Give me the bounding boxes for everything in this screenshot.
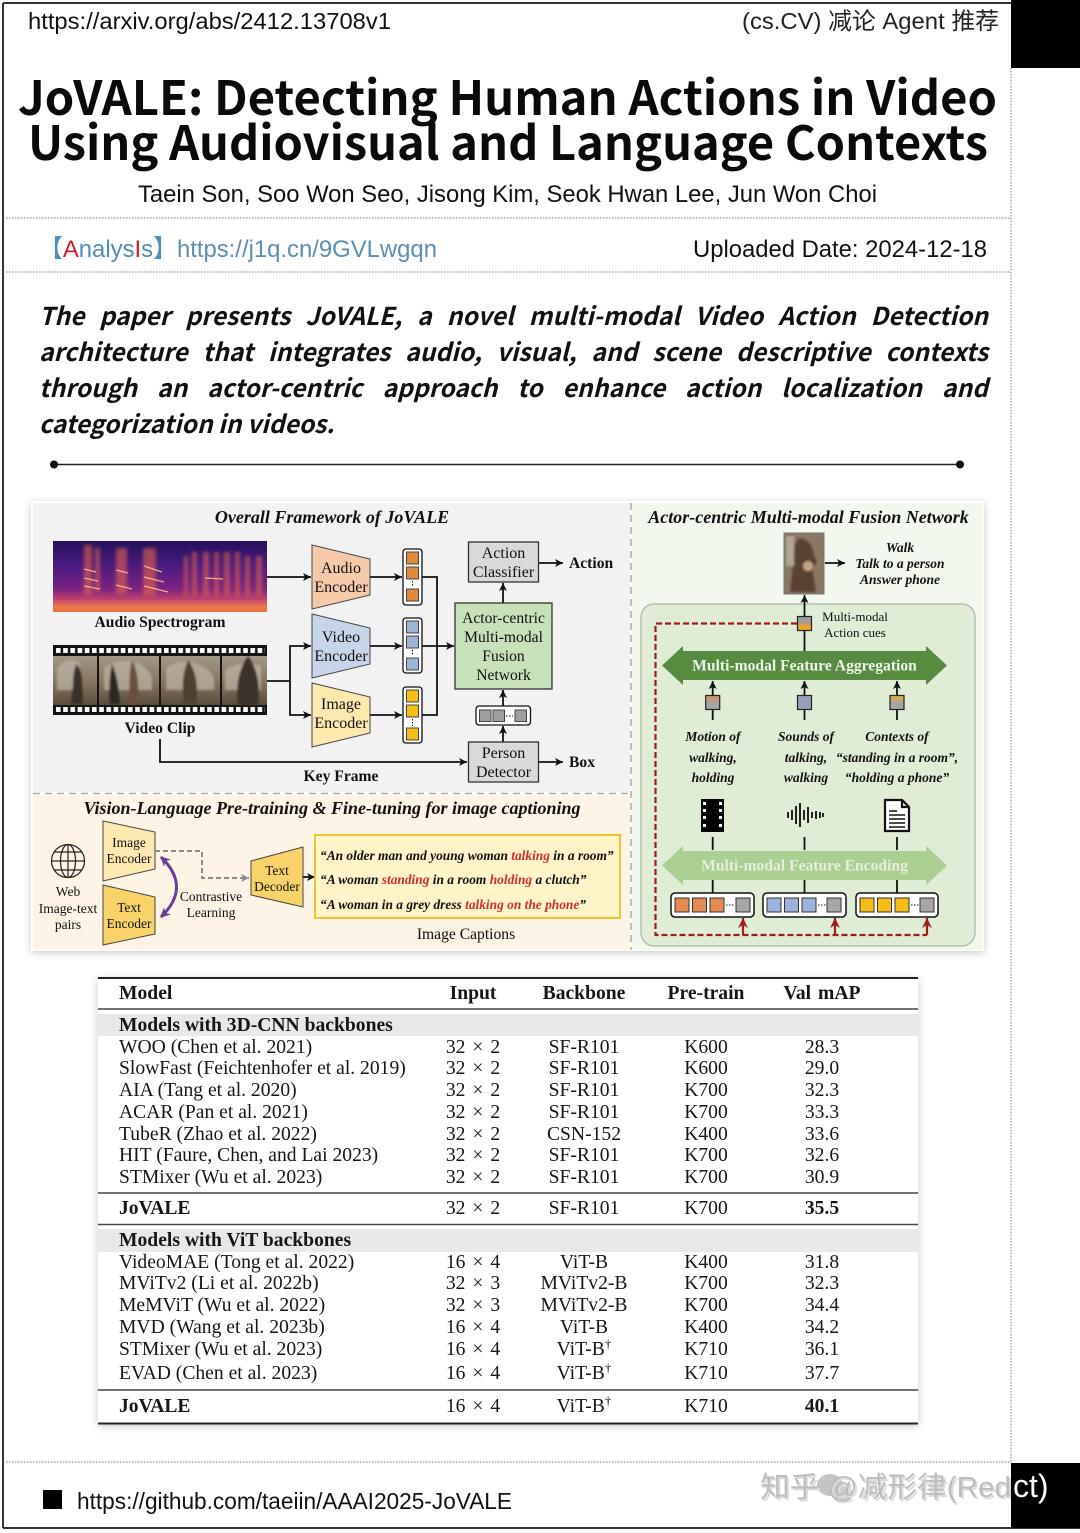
output actions [855, 540, 945, 587]
upload date: Uploaded Date: 2024-12-18 [693, 236, 987, 263]
rows: 3D-CNN models: 32 × 2 [446, 1080, 500, 1101]
rows: ViT models: K710 [684, 1339, 728, 1360]
video encoder: Encoder [314, 648, 368, 665]
text: sounds: walking [784, 770, 828, 785]
row: JoVALE ViT: 40.1 [805, 1396, 839, 1417]
rows: ViT models: ViT-B [560, 1317, 608, 1338]
rows: ViT models: K700 [684, 1273, 728, 1294]
image encoder [312, 683, 370, 747]
rows: 3D-CNN models: STMixer (Wu et al. 2023) [119, 1167, 322, 1188]
rows: 3D-CNN models: SlowFast (Feichtenhofer et al. 2019) [119, 1058, 406, 1079]
label: contrastive learning: Contrastive [180, 889, 242, 904]
row: JoVALE 3D-CNN: K700 [684, 1198, 728, 1219]
action classifier: Classifier [473, 564, 535, 581]
arrows: framework connections [160, 563, 563, 762]
action classifier [468, 542, 538, 582]
rows: ViT models: 16 × 4 [446, 1363, 500, 1384]
panel separators [33, 503, 631, 950]
person tokens [476, 706, 530, 725]
rows: 3D-CNN models: HIT (Faure, Chen, and Lai 2023) [119, 1145, 378, 1166]
label: image captions: Image Captions [417, 926, 515, 943]
icon: globe [52, 844, 84, 878]
rows: ViT models: 32 × 3 [446, 1295, 500, 1316]
rows: ViT models: ViT-B [560, 1252, 608, 1273]
fusion network box [455, 603, 552, 689]
rows: 3D-CNN models: 32 × 2 [446, 1037, 500, 1058]
authors: Taein Son, Soo Won Seo, Jisong Kim, Seok Hwan Lee, Jun Won Choi [138, 181, 877, 208]
rows: 3D-CNN models: SF-R101 [549, 1058, 619, 1079]
person detector [468, 742, 538, 782]
text: contexts: Contexts of [865, 729, 930, 744]
connectors [713, 837, 897, 893]
rows: ViT models: EVAD (Chen et al. 2023) [119, 1363, 317, 1384]
black corner block top [1011, 0, 1080, 68]
arrow: feature encoding [662, 846, 947, 885]
image encoder (pre-train): Encoder [107, 851, 152, 866]
divider [50, 460, 964, 468]
token row: context [856, 893, 938, 917]
rows: 3D-CNN models: 28.3 [805, 1037, 839, 1058]
rows: 3D-CNN models: 30.9 [805, 1167, 839, 1188]
table header: Val mAP [784, 983, 860, 1004]
rows: 3D-CNN models: 32 × 2 [446, 1167, 500, 1188]
rows: ViT models: K400 [684, 1317, 728, 1338]
rows: ViT models: ViT-B [557, 1339, 605, 1360]
icon: sound wave [788, 803, 823, 827]
row: JoVALE ViT [119, 1393, 839, 1417]
label: action output: Action [569, 555, 614, 572]
rows: 3D-CNN models: K700 [684, 1102, 728, 1123]
icon: document [885, 800, 909, 831]
inner green panel [641, 604, 975, 946]
audio tokens [403, 549, 422, 605]
rows: 3D-CNN models: 32 × 2 [446, 1102, 500, 1123]
row: JoVALE 3D-CNN [119, 1198, 839, 1219]
row: JoVALE 3D-CNN: 35.5 [805, 1198, 839, 1219]
token row: motion [671, 893, 754, 917]
image encoder: Image [321, 696, 361, 713]
text decoder: Text [265, 863, 289, 878]
label: box output: Box [569, 754, 595, 771]
github link: https://github.com/taeiin/AAAI2025-JoVALE [77, 1488, 512, 1514]
arrow: feature encoding: Multi-modal Feature Encoding [701, 858, 908, 874]
fusion network box: Actor-centric [462, 610, 545, 627]
rows: ViT models: 31.8 [805, 1252, 839, 1273]
group heading: ViT: Models with ViT backbones [119, 1230, 351, 1251]
rows: 3D-CNN models: K700 [684, 1167, 728, 1188]
row: JoVALE ViT: K710 [684, 1396, 728, 1417]
rows: 3D-CNN models: WOO (Chen et al. 2021) [119, 1037, 312, 1058]
row: JoVALE 3D-CNN: JoVALE [119, 1198, 191, 1219]
table header [119, 983, 860, 1004]
watermark: 知乎 @减形律(Red [760, 1471, 1011, 1504]
output actions: Talk to a person [855, 556, 945, 571]
rows: ViT models [119, 1252, 839, 1384]
rows: ViT models: MeMViT (Wu et al. 2022) [119, 1295, 325, 1316]
rows: ViT models: K700 [684, 1295, 728, 1316]
watermark: 知乎 @减形律(Red [762, 1473, 1013, 1506]
rows: 3D-CNN models: SF-R101 [549, 1102, 619, 1123]
person detector: Detector [476, 764, 532, 781]
image captions box: “A woman in a grey dress talking on the phone” [320, 897, 586, 912]
arrow: contrastive loop [161, 857, 176, 917]
text: motion: walking, [689, 750, 737, 765]
text: motion [684, 729, 742, 785]
audio encoder: Audio [321, 560, 361, 577]
table header: Model [119, 983, 173, 1004]
panel: actor-centric fusion network [632, 503, 983, 950]
arrow: feature aggregation: Multi-modal Feature Aggregation [692, 658, 917, 674]
text encoder: Encoder [107, 916, 152, 931]
rows: 3D-CNN models: K400 [684, 1124, 728, 1145]
footer square bullet [43, 1490, 62, 1509]
image encoder: Encoder [314, 715, 368, 732]
label: audio spectrogram: Audio Spectrogram [95, 614, 225, 631]
title: Using Audiovisual and Language Contexts [28, 105, 988, 174]
person detector: Person [482, 745, 525, 762]
token: multi-modal action cue [798, 616, 812, 630]
table header: Backbone [543, 983, 626, 1004]
rows: ViT models: 32.3 [805, 1273, 839, 1294]
video tokens [403, 618, 422, 673]
rows: 3D-CNN models: CSN-152 [547, 1124, 621, 1145]
label: multi-modal action cues: Action cues [824, 625, 886, 640]
category tag: (cs.CV) 减论 Agent 推荐 [742, 8, 999, 34]
arrow: cues to photo [804, 595, 806, 651]
token row: sound [763, 893, 846, 917]
text encoder: Text [117, 900, 141, 915]
arrow: photo to actions [825, 562, 845, 564]
video encoder [312, 614, 370, 678]
rows: ViT models: K400 [684, 1252, 728, 1273]
action classifier: Action [482, 545, 525, 562]
rows: ViT models: VideoMAE (Tong et al. 2022) [119, 1252, 354, 1273]
text: sounds: talking, [785, 750, 827, 765]
arrow: decoder to captions [303, 876, 315, 878]
image captions box: “A woman standing in a room holding a clutch” [320, 872, 587, 887]
analysis link: 【AnalysIs】https://j1q.cn/9GVLwgqn [39, 236, 437, 263]
image tokens [403, 687, 422, 743]
output actions: Walk [886, 540, 914, 555]
rows: 3D-CNN models: SF-R101 [549, 1037, 619, 1058]
rows: ViT models: STMixer (Wu et al. 2023) [119, 1339, 322, 1360]
rows: ViT models: K710 [684, 1363, 728, 1384]
rows: ViT models: MViTv2-B [540, 1273, 628, 1294]
video encoder: Video [322, 629, 360, 646]
rows: ViT models: MViTv2 (Li et al. 2022b) [119, 1273, 319, 1294]
arrows: red feedback inputs [743, 918, 927, 935]
text: contexts: “holding a phone” [845, 770, 949, 785]
rows: 3D-CNN models: 29.0 [805, 1058, 839, 1079]
rows: 3D-CNN models: SF-R101 [549, 1080, 619, 1101]
image captions box [315, 835, 620, 918]
rows: ViT models: 16 × 4 [446, 1317, 500, 1338]
audio encoder: Encoder [314, 579, 368, 596]
rows: ViT models: 16 × 4 [446, 1339, 500, 1360]
text: contexts [836, 729, 958, 785]
text decoder [251, 847, 303, 907]
row: JoVALE ViT: JoVALE [119, 1396, 191, 1417]
rows: 3D-CNN models: 32.3 [805, 1080, 839, 1101]
black corner block bottom [1011, 1463, 1080, 1528]
rows: 3D-CNN models: 32.6 [805, 1145, 839, 1166]
rows: 3D-CNN models: 32 × 2 [446, 1124, 500, 1145]
rows: ViT models: 16 × 4 [446, 1252, 500, 1273]
heading: pre-training: Vision-Language Pre-training & Fine-tuning for image captioning [83, 798, 581, 818]
label: web image-text pairs: Web [56, 884, 80, 899]
rows: ViT models: † [605, 1336, 612, 1351]
image captions box: “An older man and young woman talking in a room” [320, 848, 614, 863]
fusion network box: Fusion [482, 648, 525, 665]
text: sounds [778, 729, 835, 785]
rows: ViT models: 32 × 3 [446, 1273, 500, 1294]
rows: 3D-CNN models: AIA (Tang et al. 2020) [119, 1080, 297, 1101]
arrow: dashed to decoder [155, 851, 249, 878]
panel: overall framework [33, 503, 630, 792]
icon: film [701, 799, 724, 832]
rows: ViT models: 34.2 [805, 1317, 839, 1338]
abstract paragraph: The paper presents JoVALE, a novel multi-modal Video Action Detection architecture that integrates audio, visual, and scene descriptive contexts through an actor-centric approach to enhance action localization and categorization in videos. [39, 297, 988, 441]
label: multi-modal action cues: Multi-modal [822, 609, 888, 624]
audio encoder [312, 545, 370, 609]
rows: ViT models: 36.1 [805, 1339, 839, 1360]
results table [98, 977, 918, 1424]
video clip film strip [53, 645, 267, 715]
rows: 3D-CNN models [119, 1037, 839, 1188]
group heading: 3D-CNN: Models with 3D-CNN backbones [119, 1015, 393, 1036]
rows: 3D-CNN models: K600 [684, 1058, 728, 1079]
row: JoVALE ViT: † [605, 1393, 612, 1408]
rows: 3D-CNN models: 32 × 2 [446, 1058, 500, 1079]
title [18, 60, 997, 174]
label: web image-text pairs: pairs [55, 917, 81, 932]
rows: 3D-CNN models: SF-R101 [549, 1167, 619, 1188]
text: motion: holding [692, 770, 735, 785]
actor photo [784, 533, 824, 594]
row: JoVALE 3D-CNN: SF-R101 [549, 1198, 619, 1219]
figure panel: framework [31, 501, 984, 951]
text: contexts: “standing in a room”, [836, 750, 958, 765]
row: JoVALE ViT: ViT-B [557, 1396, 605, 1417]
fusion network box: Multi-modal [464, 629, 544, 646]
heading: overall framework: Overall Framework of JoVALE [215, 507, 449, 527]
fusion network box: Network [476, 667, 531, 684]
row: JoVALE 3D-CNN: 32 × 2 [446, 1198, 500, 1219]
rows: ViT models: ViT-B [557, 1363, 605, 1384]
heading: fusion network: Actor-centric Multi-modal Fusion Network [647, 507, 969, 527]
rows: 3D-CNN models: ACAR (Pan et al. 2021) [119, 1102, 308, 1123]
text encoder [103, 885, 155, 945]
text: sounds: Sounds of [778, 729, 835, 744]
panel: vision-language pre-training [33, 795, 630, 950]
label: contrastive learning: Learning [187, 905, 236, 920]
rows: 3D-CNN models: K700 [684, 1145, 728, 1166]
rows: 3D-CNN models: 33.6 [805, 1124, 839, 1145]
rows: ViT models: MViTv2-B [540, 1295, 628, 1316]
row: JoVALE ViT: 16 × 4 [446, 1396, 500, 1417]
text: motion: Motion of [684, 729, 742, 744]
title: JoVALE: Detecting Human Actions in Video [18, 60, 997, 129]
rows: 3D-CNN models: 33.3 [805, 1102, 839, 1123]
red dashed feedback [656, 624, 927, 935]
output actions: Answer phone [859, 572, 940, 587]
label: multi-modal action cues [822, 609, 888, 640]
image encoder (pre-train) [103, 821, 155, 881]
tokens: per-modality [706, 681, 904, 720]
rows: 3D-CNN models: K700 [684, 1080, 728, 1101]
audio spectrogram [53, 541, 267, 612]
label: contrastive learning [180, 889, 242, 920]
arxiv link: https://arxiv.org/abs/2412.13708v1 [28, 8, 391, 34]
text decoder: Decoder [254, 879, 300, 894]
label: video clip: Video Clip [125, 720, 196, 737]
label: key frame: Key Frame [304, 768, 379, 785]
label: web image-text pairs: Image-text [39, 901, 97, 916]
rows: 3D-CNN models: TubeR (Zhao et al. 2022) [119, 1124, 317, 1145]
table header: Input [450, 983, 497, 1004]
table header: Pre-train [668, 983, 745, 1004]
rows: 3D-CNN models: SF-R101 [549, 1145, 619, 1166]
rows: ViT models: † [605, 1360, 612, 1375]
rows: ViT models: 37.7 [805, 1363, 839, 1384]
label: web image-text pairs [39, 884, 97, 932]
rows: ViT models: 34.4 [805, 1295, 839, 1316]
image encoder (pre-train): Image [112, 835, 146, 850]
rows: 3D-CNN models: K600 [684, 1037, 728, 1058]
arrow: feature aggregation [662, 646, 947, 685]
watermark end on black: ct) [1013, 1468, 1049, 1504]
rows: 3D-CNN models: 32 × 2 [446, 1145, 500, 1166]
rows: ViT models: MVD (Wang et al. 2023b) [119, 1317, 325, 1338]
